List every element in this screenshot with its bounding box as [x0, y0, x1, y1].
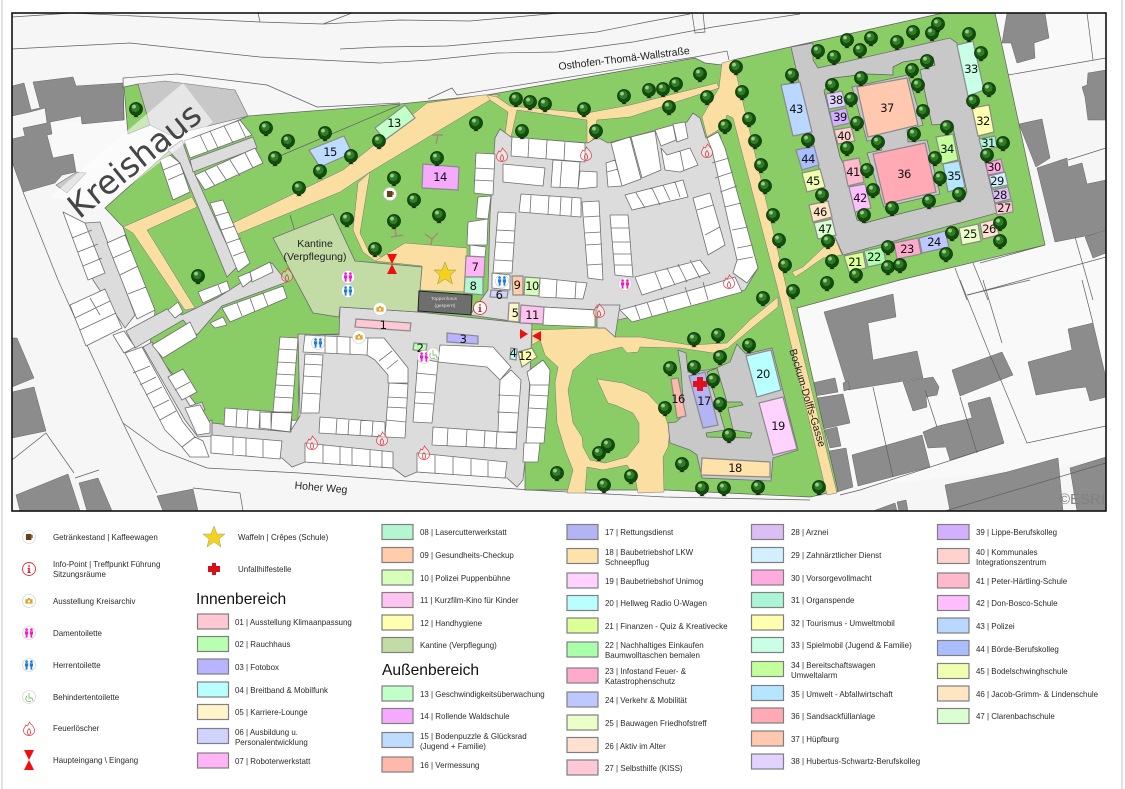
legend: stands 28-38	[752, 524, 920, 769]
stand 5	[508, 303, 519, 322]
stand 36	[873, 143, 936, 204]
legend 28: 28 | Arznei	[791, 528, 829, 537]
stand 29: 29	[990, 174, 1004, 188]
stand 32: 32	[976, 114, 990, 128]
stands: outer area	[309, 41, 1013, 477]
label: fire extinguisher: Feuerlöscher	[53, 724, 100, 733]
stand 22: 22	[867, 250, 881, 264]
legend 33: 33 | Spielmobil (Jugend & Familie)	[791, 641, 912, 650]
legend 22: Baumwolltaschen bemalen	[605, 651, 700, 660]
icon: gents toilet	[22, 658, 36, 672]
street label: Osthofen-Thomä-Wallstraße: Osthofen-Thomä-Wallstraße	[558, 45, 691, 73]
stand 46	[809, 201, 832, 222]
stand 31: 31	[981, 136, 995, 150]
label: waffles: Waffeln | Crêpes (Schule)	[238, 533, 329, 542]
east block green island	[824, 57, 967, 223]
legend 34: 34 | Bereitschaftswagen	[791, 661, 876, 670]
white stalls: west wing	[63, 120, 287, 457]
stand 47	[814, 219, 836, 239]
stand 8: 8	[470, 279, 477, 293]
legend 05: 05 | Karriere-Lounge	[235, 708, 308, 717]
legend: stands 08-12 and Kantine	[382, 524, 519, 652]
legend 40	[938, 548, 1047, 567]
legend 02: 02 | Rauchhaus	[235, 640, 290, 649]
legend 41	[938, 573, 1068, 588]
green island in parking	[706, 368, 752, 438]
legend 42: 42 | Don-Bosco-Schule	[976, 599, 1058, 608]
stand 21: 21	[848, 255, 862, 269]
white stalls: south block	[211, 335, 550, 478]
legend: stands 39-47	[938, 524, 1099, 724]
legend 18: Schneepflug	[605, 558, 649, 567]
stand 35: 35	[947, 169, 961, 183]
surrounding white plots	[50, 13, 1106, 491]
legend 37: 37 | Hüpfburg	[791, 735, 839, 744]
stand 45	[802, 169, 825, 192]
legend 13: 13 | Geschwindigkeitsüberwachung	[420, 690, 545, 699]
courtyards and corridors	[85, 113, 758, 487]
legend 27	[567, 760, 683, 775]
legend 14: 14 | Rollende Waldschule	[420, 712, 510, 721]
legend: stands 13-16	[382, 686, 545, 772]
heading: Innenbereich: Innenbereich	[196, 591, 286, 608]
legend 21: 21 | Finanzen - Quiz & Kreativecke	[605, 622, 728, 631]
stand 12	[518, 348, 537, 367]
first aid cross	[693, 377, 707, 391]
stand 20	[746, 350, 781, 397]
legend 30: 30 | Vorsorgevollmacht	[791, 574, 872, 583]
stand 6: 6	[496, 288, 503, 302]
legend 33	[752, 638, 912, 652]
legend 44	[938, 640, 1059, 656]
legend 20	[567, 596, 707, 610]
legend 16: 16 | Vermessung	[420, 761, 479, 770]
icon: accessible toilet	[22, 690, 36, 704]
legend 10: 10 | Polizei Puppenbühne	[420, 574, 511, 583]
stand 15	[309, 136, 352, 167]
legend 26: 26 | Aktiv im Alter	[605, 742, 666, 751]
stand 27: 27	[997, 201, 1011, 215]
stand 14	[422, 164, 459, 190]
stand 16: 16	[671, 392, 685, 406]
stand 25: 25	[963, 227, 977, 241]
legend 23: Katastrophenschutz	[605, 677, 675, 686]
Toppenhaus building	[418, 291, 472, 315]
legend 03: 03 | Fotobox	[235, 663, 279, 672]
icon: star	[203, 526, 225, 547]
map panel	[12, 13, 1106, 511]
stand 11	[520, 305, 544, 324]
stand 7	[465, 256, 485, 277]
stand 1	[355, 318, 411, 332]
legend 39	[938, 524, 1057, 540]
stand 11: 11	[525, 308, 539, 322]
stand 45: 45	[806, 174, 820, 188]
stand 42: 42	[853, 191, 867, 205]
label: accessible toilet: Behindertentoilette	[53, 693, 120, 702]
stand 12: 12	[518, 349, 532, 363]
stand 19	[759, 397, 797, 455]
Kreishaus grey forecourt	[56, 81, 248, 193]
stand 39	[830, 108, 850, 127]
fire extinguishers on map	[282, 144, 734, 460]
internal green dividers	[275, 105, 400, 235]
Kantine label: Kantine	[297, 238, 333, 250]
legend 45: 45 | Bodelschwinghschule	[976, 667, 1068, 676]
legend 31	[752, 592, 855, 608]
stand 13: 13	[387, 116, 401, 130]
legend 32	[752, 615, 895, 630]
legend 43	[938, 618, 1015, 633]
icon: coffee	[22, 530, 36, 544]
legend 19	[567, 573, 703, 588]
stand 40: 40	[837, 129, 851, 143]
legend 16	[382, 757, 479, 772]
stand 28	[992, 187, 1011, 203]
stand 9: 9	[514, 278, 521, 292]
legend 30	[752, 570, 872, 585]
stand 32	[972, 105, 994, 136]
legend 08: 08 | Lasercutterwerkstatt	[420, 528, 508, 537]
stand 40	[834, 127, 855, 144]
trees	[129, 17, 1010, 496]
stand 3	[447, 332, 478, 346]
legend 28	[752, 524, 829, 540]
legend 36	[752, 708, 876, 723]
legend 18: 18 | Baubetriebshof LKW	[605, 548, 693, 557]
legend 06: 06 | Ausbildung u.	[235, 728, 298, 737]
stand 41: 41	[846, 165, 860, 179]
legend 25: 25 | Bauwagen Friedhofstreff	[605, 719, 707, 728]
stand 30	[986, 159, 1004, 175]
legend 24: 24 | Verkehr & Mobilität	[605, 696, 688, 705]
legend 12: 12 | Handhygiene	[420, 619, 483, 628]
legend 29: 29 | Zahnärztlicher Dienst	[791, 551, 882, 560]
legend 05	[198, 704, 308, 720]
legend 04	[198, 682, 328, 697]
stand 29	[989, 172, 1008, 188]
street label: Hoher Weg: Hoher Weg	[294, 480, 348, 496]
legend 18	[567, 548, 694, 567]
legend 07: 07 | Roboterwerkstatt	[235, 757, 311, 766]
legend 36: 36 | Sandsackfüllanlage	[791, 712, 876, 721]
legend 26	[567, 738, 666, 752]
Verpflegung label: (Verpflegung)	[283, 251, 347, 263]
legend 17	[567, 524, 674, 540]
stand 25	[959, 224, 981, 245]
icon: fire extinguisher	[24, 722, 34, 736]
stand 47: 47	[818, 222, 832, 236]
legend 21	[567, 618, 728, 633]
stand 18	[701, 458, 770, 477]
legend 06	[198, 728, 308, 747]
stand 8	[464, 277, 483, 295]
Toppenhaus block	[418, 291, 472, 315]
star: Waffeln	[434, 262, 456, 284]
stand 17: 17	[697, 394, 711, 408]
icon: first aid	[208, 563, 220, 575]
stand 46: 46	[813, 205, 827, 219]
grey frames for 36 and 37	[852, 75, 940, 207]
map base	[12, 13, 1106, 511]
stand 43	[781, 82, 812, 136]
stand 22	[864, 247, 886, 267]
legend 44: 44 | Börde-Berufskolleg	[976, 645, 1059, 654]
legend 03	[198, 659, 279, 674]
label: coffee: Getränkestand | Kaffeewagen	[53, 533, 158, 542]
stand 38	[826, 91, 846, 109]
Toppenhaus status: (gesperrt)	[435, 303, 456, 309]
legend 04: 04 | Breitband & Mobilfunk	[235, 686, 328, 695]
legend: stands 01-07	[198, 614, 352, 768]
stand 26	[980, 219, 999, 239]
legend 42	[938, 596, 1058, 610]
legend 35: 35 | Umwelt - Abfallwirtschaft	[791, 690, 894, 699]
label: first aid: Unfallhilfestelle	[238, 565, 292, 574]
legend 47	[938, 708, 1055, 724]
legend 22: 22 | Nachhaltiges Einkaufen	[605, 641, 704, 650]
stand 10: 10	[525, 279, 539, 293]
icon: info	[22, 562, 36, 576]
legend 34: Umweltalarm	[791, 671, 838, 680]
stand 20: 20	[756, 367, 770, 381]
legend Kantine: Kantine (Verpflegung)	[420, 641, 497, 650]
legend 43: 43 | Polizei	[976, 622, 1015, 631]
legend 27: 27 | Selbsthilfe (KISS)	[605, 764, 683, 773]
campus green ground	[105, 13, 1045, 497]
stand 24	[919, 231, 949, 253]
picnic benches	[391, 135, 443, 245]
legend 46	[938, 686, 1099, 701]
legend: symbols	[22, 526, 329, 770]
stand 4: 4	[510, 346, 517, 360]
legend 15: (Jugend + Familie)	[420, 742, 486, 751]
legend 31: 31 | Organspende	[791, 596, 855, 605]
Kantine building	[273, 214, 422, 317]
stand 44	[796, 146, 819, 170]
legend 14	[382, 708, 510, 724]
stand 38: 38	[829, 93, 843, 107]
legend 15: 15 | Bodenpuzzle & Glücksrad	[420, 732, 527, 741]
stand 15: 15	[323, 145, 337, 159]
street label: Bockum-Dolffs-Gasse: Bockum-Dolffs-Gasse	[786, 348, 828, 449]
stand 16	[671, 378, 686, 418]
legend 39: 39 | Lippe-Berufskolleg	[976, 528, 1057, 537]
copyright: ©ESRI	[1059, 491, 1105, 508]
green at Kreishaus	[124, 84, 150, 134]
stand 37	[857, 78, 918, 137]
stand 37: 37	[880, 101, 894, 115]
legend 17: 17 | Rettungsdienst	[605, 528, 674, 537]
legend 15	[382, 732, 527, 751]
stand 34: 34	[940, 142, 954, 156]
stand 2: 2	[417, 341, 424, 355]
legend 29	[752, 548, 882, 562]
stand 14: 14	[433, 170, 447, 184]
legend 09: 09 | Gesundheits-Checkup	[420, 551, 514, 560]
legend 40: Integrationszentrum	[976, 558, 1047, 567]
stand 24: 24	[927, 235, 941, 249]
stands: inner area	[355, 256, 544, 367]
legend 07	[198, 753, 311, 768]
legend 34	[752, 661, 876, 680]
legend 47: 47 | Clarenbachschule	[976, 712, 1055, 721]
stand 6	[489, 289, 509, 299]
legend 23	[567, 667, 687, 686]
Kreishaus label: Kreishaus	[60, 95, 209, 226]
legend: stands 17-27	[567, 524, 728, 775]
stand 10	[524, 277, 540, 296]
legend 32: 32 | Tourismus - Umweltmobil	[791, 619, 895, 628]
stand 35	[943, 161, 965, 192]
stand 30: 30	[987, 160, 1001, 174]
stand 44: 44	[801, 152, 815, 166]
legend 01	[198, 614, 352, 629]
stand 3: 3	[460, 332, 467, 346]
label: archive: Ausstellung Kreisarchiv	[53, 597, 136, 606]
stand 18: 18	[728, 461, 742, 475]
stand 19: 19	[771, 419, 785, 433]
lower east parking	[668, 344, 798, 481]
Toppenhaus label: Toppenhaus	[431, 296, 458, 302]
stand 26: 26	[982, 222, 996, 236]
legend 06: Personalentwicklung	[235, 738, 308, 747]
label: info point: Info-Point | Treffpunkt Führung	[53, 560, 160, 569]
legend 02	[198, 636, 290, 652]
legend 11: 11 | Kurzfilm-Kino für Kinder	[420, 596, 519, 605]
stand 42	[849, 184, 871, 212]
legend 22	[567, 641, 704, 660]
stand 1: 1	[380, 318, 387, 332]
legend 41: 41 | Peter-Härtling-Schule	[976, 577, 1068, 586]
legend 20: 20 | Hellweg Radio Ü-Wagen	[605, 599, 707, 608]
label: ladies toilet: Damentoilette	[53, 629, 103, 638]
stand 21	[844, 252, 866, 272]
legend 38: 38 | Hubertus-Schwartz-Berufskolleg	[791, 757, 920, 766]
toilet and info icons on map	[312, 188, 632, 364]
stand 2	[412, 342, 428, 352]
legend 24	[567, 692, 688, 707]
legend 37	[752, 731, 839, 746]
label: gents toilet: Herrentoilette	[53, 661, 101, 670]
stand 23	[894, 238, 921, 259]
paths	[123, 60, 842, 495]
icon: ladies toilet	[22, 626, 36, 640]
stand 33: 33	[964, 62, 978, 76]
heading: Außenbereich: Außenbereich	[382, 662, 479, 679]
street and parcel lines	[12, 13, 1106, 511]
legend 23: 23 | Infostand Feuer- &	[605, 667, 686, 676]
stand 39: 39	[833, 110, 847, 124]
white stalls: north block	[467, 122, 758, 327]
Kantine shape	[273, 214, 422, 317]
legend 01: 01 | Ausstellung Klimaanpassung	[235, 618, 352, 627]
legend 13	[382, 686, 545, 701]
stand 34	[936, 134, 958, 164]
icon: archive	[22, 594, 36, 608]
legend 19: 19 | Baubetriebshof Unimog	[605, 577, 703, 586]
legend 25	[567, 715, 707, 730]
icon: entrance	[24, 750, 34, 770]
stand 43: 43	[789, 102, 803, 116]
stand 7: 7	[472, 260, 479, 274]
stand 36: 36	[897, 167, 911, 181]
stand 41	[843, 158, 864, 186]
map frame	[12, 13, 1106, 511]
legend 35	[752, 686, 894, 700]
east block parking	[791, 38, 997, 255]
label: info point: Sitzungsräume	[53, 570, 107, 579]
stand 17	[689, 372, 718, 428]
legend 46: 46 | Jacob-Grimm- & Lindenschule	[976, 690, 1099, 699]
legend 38	[752, 754, 920, 769]
stand 33	[957, 41, 984, 96]
Kreishaus band	[50, 83, 213, 208]
stand 28: 28	[993, 188, 1007, 202]
legend 45	[938, 664, 1068, 678]
legend 40: 40 | Kommunales	[976, 548, 1038, 557]
stand 23: 23	[900, 242, 914, 256]
stand 13	[375, 105, 415, 140]
stand 9	[512, 276, 523, 295]
stand 5: 5	[512, 306, 519, 320]
east entrance marker	[520, 329, 541, 341]
surrounding buildings	[12, 13, 1106, 511]
label: entrance: Haupteingang \ Eingang	[53, 756, 138, 765]
main entrance marker	[387, 254, 397, 274]
